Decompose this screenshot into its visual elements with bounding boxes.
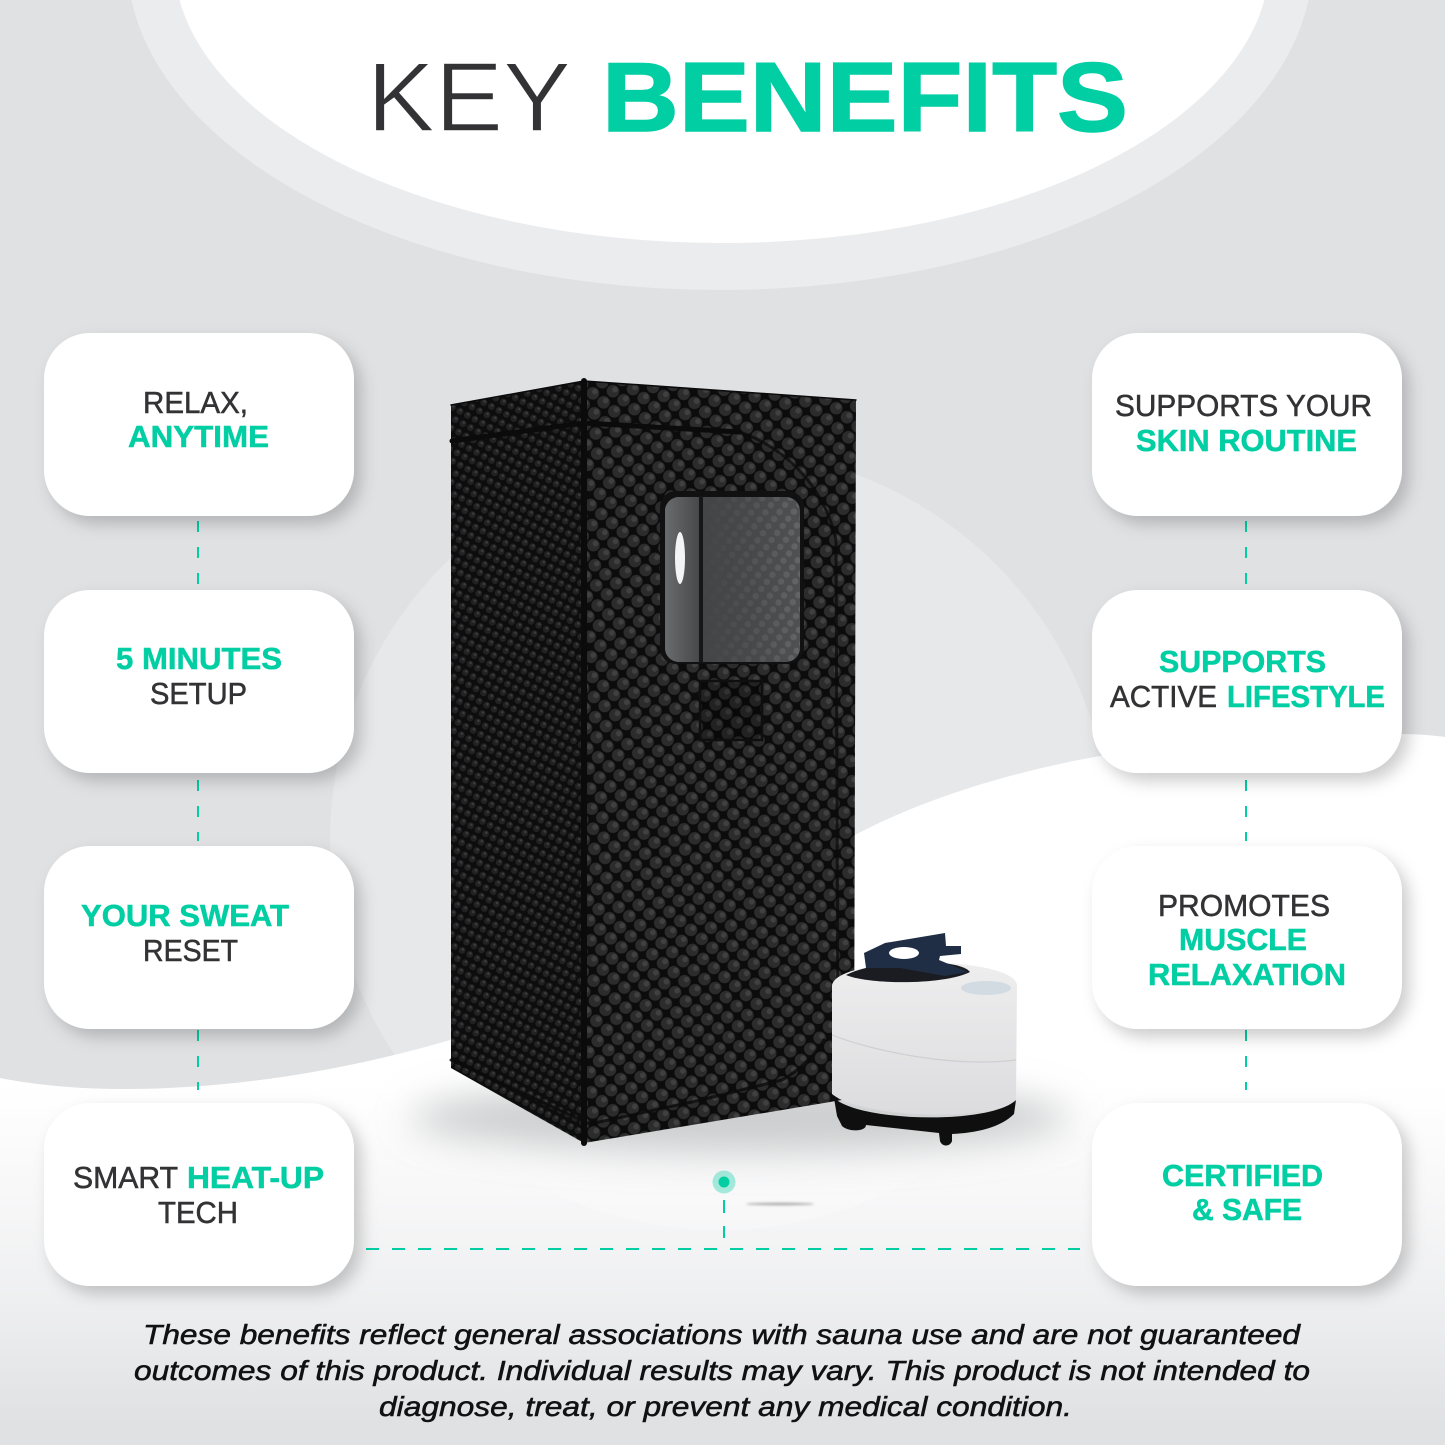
- card: supports active lifestyle: ACTIVE: [1110, 679, 1217, 714]
- card: supports active lifestyle: SUPPORTS: [1159, 644, 1326, 679]
- generator base: [834, 1098, 1016, 1146]
- card: promotes muscle relaxation: PROMOTES: [1158, 888, 1330, 923]
- header white arc: [174, 0, 1270, 243]
- bottom white floor: [0, 734, 1445, 1445]
- generator control panel: [961, 981, 1011, 995]
- title: [367, 42, 1128, 152]
- card: certified and safe: CERTIFIED: [1162, 1158, 1323, 1193]
- disclaimer text: outcomes of this product. Individual results may vary. This product is not intended to: [134, 1355, 1310, 1386]
- card: your sweat reset: [44, 846, 354, 1029]
- card: relax anytime: RELAX,: [143, 385, 248, 420]
- card: your sweat reset: YOUR SWEAT: [81, 898, 289, 933]
- card: your sweat reset: RESET: [143, 933, 238, 968]
- disclaimer text: These benefits reflect general associations with sauna use and are not guaranteed: [143, 1319, 1302, 1350]
- card: supports active lifestyle: LIFESTYLE: [1227, 679, 1385, 714]
- title: KEY: [367, 42, 571, 152]
- card: supports your skin routine: [1092, 333, 1402, 516]
- tent front face: [584, 381, 856, 1143]
- product: sauna tent: [451, 381, 856, 1143]
- disclaimer text: diagnose, treat, or prevent any medical condition.: [379, 1391, 1072, 1422]
- central pale circle: [330, 450, 1110, 1230]
- card: supports your skin routine: SKIN ROUTINE: [1136, 423, 1357, 458]
- card: supports active lifestyle: [1092, 590, 1402, 773]
- card: promotes muscle relaxation: MUSCLE: [1179, 922, 1307, 957]
- small floor shadow line: [746, 1203, 814, 1205]
- card: 5 minutes setup: [44, 590, 354, 773]
- card: smart heat-up tech: HEAT-UP: [187, 1160, 324, 1195]
- card: smart heat-up tech: [44, 1103, 354, 1286]
- card: promotes muscle relaxation: RELAXATION: [1148, 957, 1346, 992]
- floor shadow: [410, 1082, 1070, 1154]
- generator body seam: [832, 1035, 1016, 1062]
- card: smart heat-up tech: SMART: [73, 1160, 178, 1195]
- tent edges and zipper: [451, 381, 856, 1143]
- card: smart heat-up tech: TECH: [158, 1195, 238, 1230]
- card: 5 minutes setup: 5 MINUTES: [116, 641, 282, 676]
- generator hose connector: [864, 933, 968, 976]
- card: certified and safe: [1092, 1103, 1402, 1286]
- card: promotes muscle relaxation: [1092, 846, 1402, 1029]
- card: certified and safe: & SAFE: [1192, 1192, 1302, 1227]
- tent window: [660, 491, 804, 664]
- generator body: [832, 962, 1017, 1114]
- tent pocket: [700, 681, 762, 740]
- card: relax anytime: ANYTIME: [128, 419, 269, 454]
- connectors: dashed lines: [198, 521, 1246, 1249]
- card: 5 minutes setup: SETUP: [150, 676, 247, 711]
- product: steam generator: [832, 933, 1017, 1146]
- tent side face: [451, 381, 584, 1143]
- generator lid ring: [846, 962, 970, 982]
- title: BENEFITS: [602, 42, 1128, 152]
- anchor dot: [712, 1170, 736, 1194]
- card: relax anytime: [44, 333, 354, 516]
- disclaimer text: [134, 1319, 1310, 1422]
- header halo: [127, 0, 1313, 290]
- card: supports your skin routine: SUPPORTS YOUR: [1115, 388, 1372, 423]
